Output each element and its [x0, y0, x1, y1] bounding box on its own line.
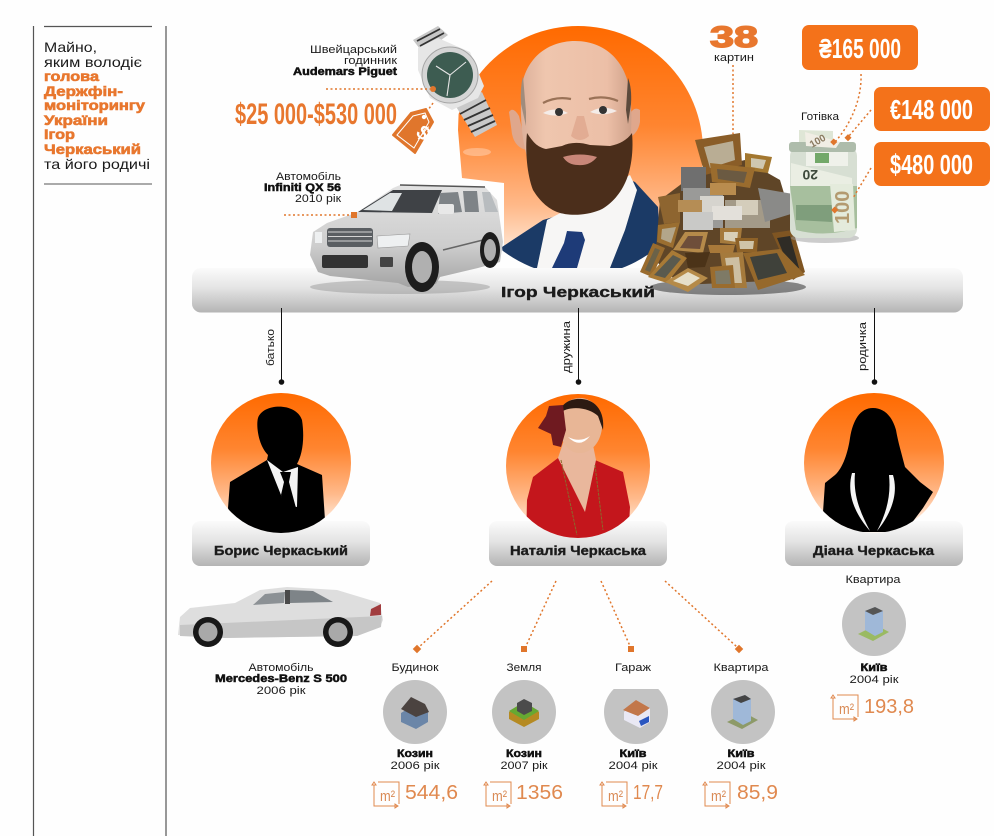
sidebar text: та його родичі — [44, 156, 150, 172]
sidebar text: Держфін- — [44, 83, 123, 99]
property: land, Козин: Земля — [506, 662, 542, 674]
property: apartment, Київ: 85,9 — [737, 782, 778, 804]
icon: price tag: $ — [412, 121, 434, 145]
property: garage, Київ: 17,7 — [633, 782, 663, 804]
name bar: Наталія Черкаська — [489, 521, 667, 566]
paintings count — [710, 21, 758, 64]
car connector — [284, 212, 357, 218]
connector: дружина — [561, 308, 581, 385]
pill: hryvnia cash — [802, 25, 918, 70]
watch: Audemars Piguet — [413, 26, 497, 137]
sidebar text: Черкаський — [44, 141, 141, 157]
portrait: Борис silhouette — [211, 393, 351, 540]
property: house, Козин: Будинок — [392, 662, 439, 674]
property: Діана apartment, Київ — [831, 574, 914, 721]
callout text: watch — [293, 44, 397, 78]
connector: дружина: дружина — [561, 320, 573, 373]
property: Діана apartment, Київ: m² — [839, 701, 854, 718]
property: house, Козин: m² — [380, 788, 395, 805]
cash jar — [789, 130, 859, 243]
property: house, Козин — [372, 662, 458, 808]
watch connector — [326, 86, 436, 110]
cash jar: 100 — [832, 191, 854, 224]
property: house, Козин: 544,6 — [405, 782, 458, 804]
property: Діана apartment, Київ: 2004 рік — [850, 674, 899, 686]
sidebar text: Майно, — [44, 39, 97, 55]
property: land, Козин: Козин — [506, 748, 542, 760]
main name bar: Ігор Черкаський — [192, 268, 963, 312]
property: Діана apartment, Київ: Квартира — [846, 574, 902, 586]
property: garage, Київ: m² — [608, 788, 623, 805]
name bar: Наталія Черкаська: Наталія Черкаська — [510, 543, 647, 558]
cash jar: 20 — [802, 167, 818, 183]
pill: euro cash — [874, 87, 990, 131]
callout text: Infiniti: Автомобіль — [276, 171, 341, 183]
name bar: Діана Черкаська: Діана Черкаська — [813, 543, 935, 558]
property: apartment, Київ: m² — [711, 788, 726, 805]
property: land, Козин: 1356 — [516, 782, 563, 804]
paintings count: 38 — [710, 21, 758, 54]
callout text: watch: Швейцарський — [310, 44, 397, 56]
icon: price tag — [393, 109, 434, 153]
property: apartment, Київ: Квартира — [714, 662, 770, 674]
pill: hryvnia cash: ₴165 000 — [819, 33, 901, 64]
main name bar: Ігор Черкаський: Ігор Черкаський — [501, 284, 655, 301]
property: apartment, Київ: 2004 рік — [716, 760, 766, 772]
property: garage, Київ: 2004 рік — [608, 760, 658, 772]
connector: родичка — [857, 308, 877, 385]
property: garage, Київ: Київ — [620, 748, 647, 760]
property connectors — [413, 581, 743, 653]
paintings connector — [732, 65, 734, 134]
car: Infiniti QX 56 — [310, 185, 503, 294]
sidebar text: моніторингу — [44, 97, 145, 113]
callout text: Mercedes: 2006 рік — [256, 685, 306, 697]
property: Діана apartment, Київ: 193,8 — [864, 696, 914, 718]
connector: родичка: родичка — [857, 321, 869, 371]
callout text: watch: годинник — [344, 55, 397, 67]
callout text: Infiniti — [264, 171, 341, 205]
paintings pile — [640, 133, 806, 295]
property: land, Козин — [484, 662, 563, 808]
property: apartment, Київ — [703, 662, 778, 808]
car: Mercedes-Benz S 500 — [178, 587, 383, 647]
property: garage, Київ: Гараж — [615, 662, 652, 674]
callout text: watch: Audemars Piguet — [293, 66, 397, 78]
portrait: Діана silhouette — [804, 393, 944, 533]
property: house, Козин: 2006 рік — [390, 760, 440, 772]
property: garage, Київ — [600, 662, 668, 808]
sidebar text: голова — [44, 68, 99, 84]
connector: батько: батько — [265, 329, 277, 366]
name bar: Діана Черкаська — [785, 521, 963, 566]
sidebar text: Ігор — [44, 126, 75, 142]
name bar: Борис Черкаський: Борис Черкаський — [214, 543, 348, 558]
property: house, Козин: Козин — [397, 748, 433, 760]
side rules — [34, 26, 166, 836]
cash connectors — [830, 74, 871, 214]
callout text: Infiniti: 2010 рік — [295, 193, 341, 205]
sidebar text: України — [44, 112, 108, 128]
portrait: Наталія — [506, 394, 650, 545]
connector: батько — [265, 308, 284, 385]
paintings count: картин — [714, 52, 754, 64]
cash jar: 100 — [808, 133, 828, 151]
price range: $25 000-$530 000 — [235, 98, 397, 131]
property: land, Козин: m² — [492, 788, 507, 805]
callout text: Mercedes: Mercedes-Benz S 500 — [215, 673, 347, 685]
sidebar text: яким володіє — [44, 54, 142, 70]
property: land, Козин: 2007 рік — [500, 760, 548, 772]
property: apartment, Київ: Київ — [728, 748, 755, 760]
callout text: Mercedes — [215, 662, 347, 697]
sidebar text — [44, 39, 150, 172]
callout text: Infiniti: Infiniti QX 56 — [264, 182, 341, 194]
cash label: Готівка — [801, 111, 840, 123]
property: Діана apartment, Київ: Київ — [860, 662, 888, 674]
portrait: Ігор Черкаський — [458, 26, 702, 268]
callout text: Mercedes: Автомобіль — [248, 662, 314, 674]
pill: dollar cash — [874, 142, 990, 186]
name bar: Борис Черкаський — [192, 521, 370, 566]
